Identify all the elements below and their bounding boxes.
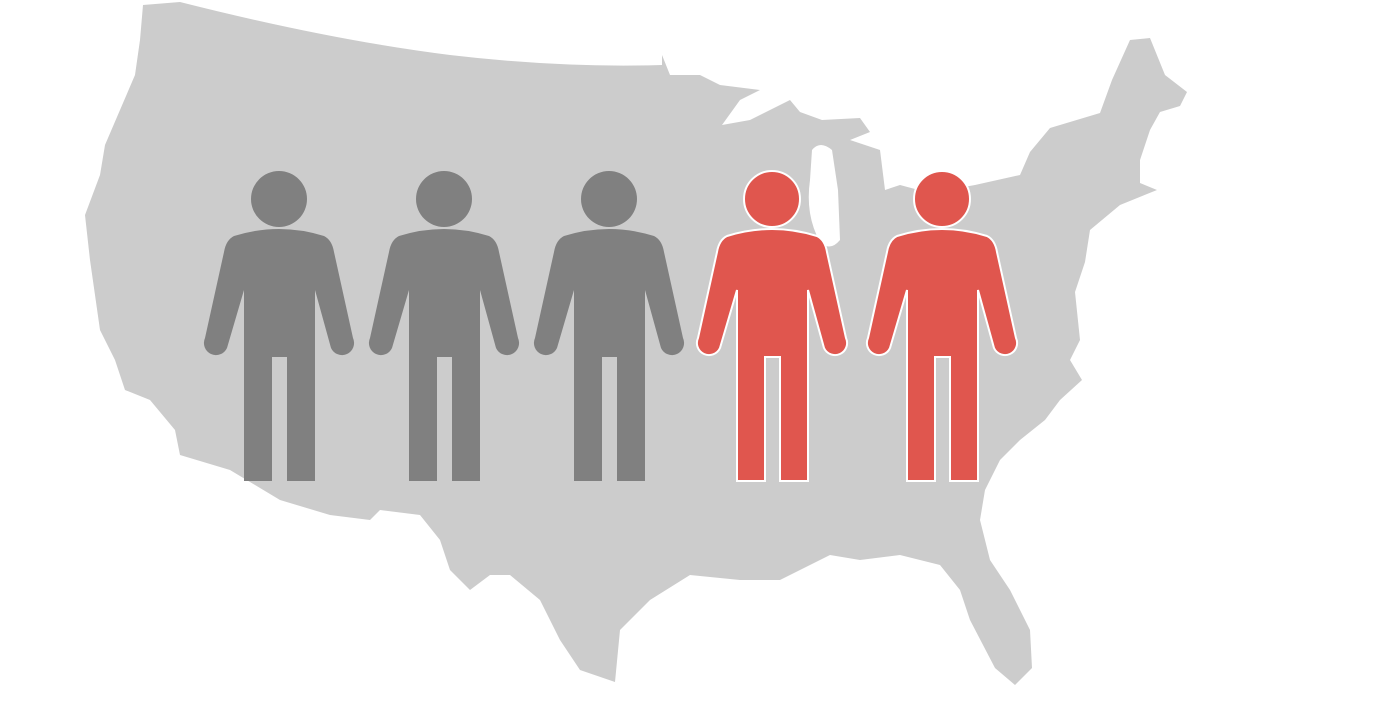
person icon 2 (grey) <box>369 171 519 481</box>
person icon 3 (grey) <box>534 171 684 481</box>
map: United States silhouette <box>85 2 1187 685</box>
person icon 1 (grey) <box>204 171 354 481</box>
person icon 4 (red) <box>697 171 847 481</box>
lake michigan <box>809 145 840 247</box>
person icon 5 (red) <box>867 171 1017 481</box>
